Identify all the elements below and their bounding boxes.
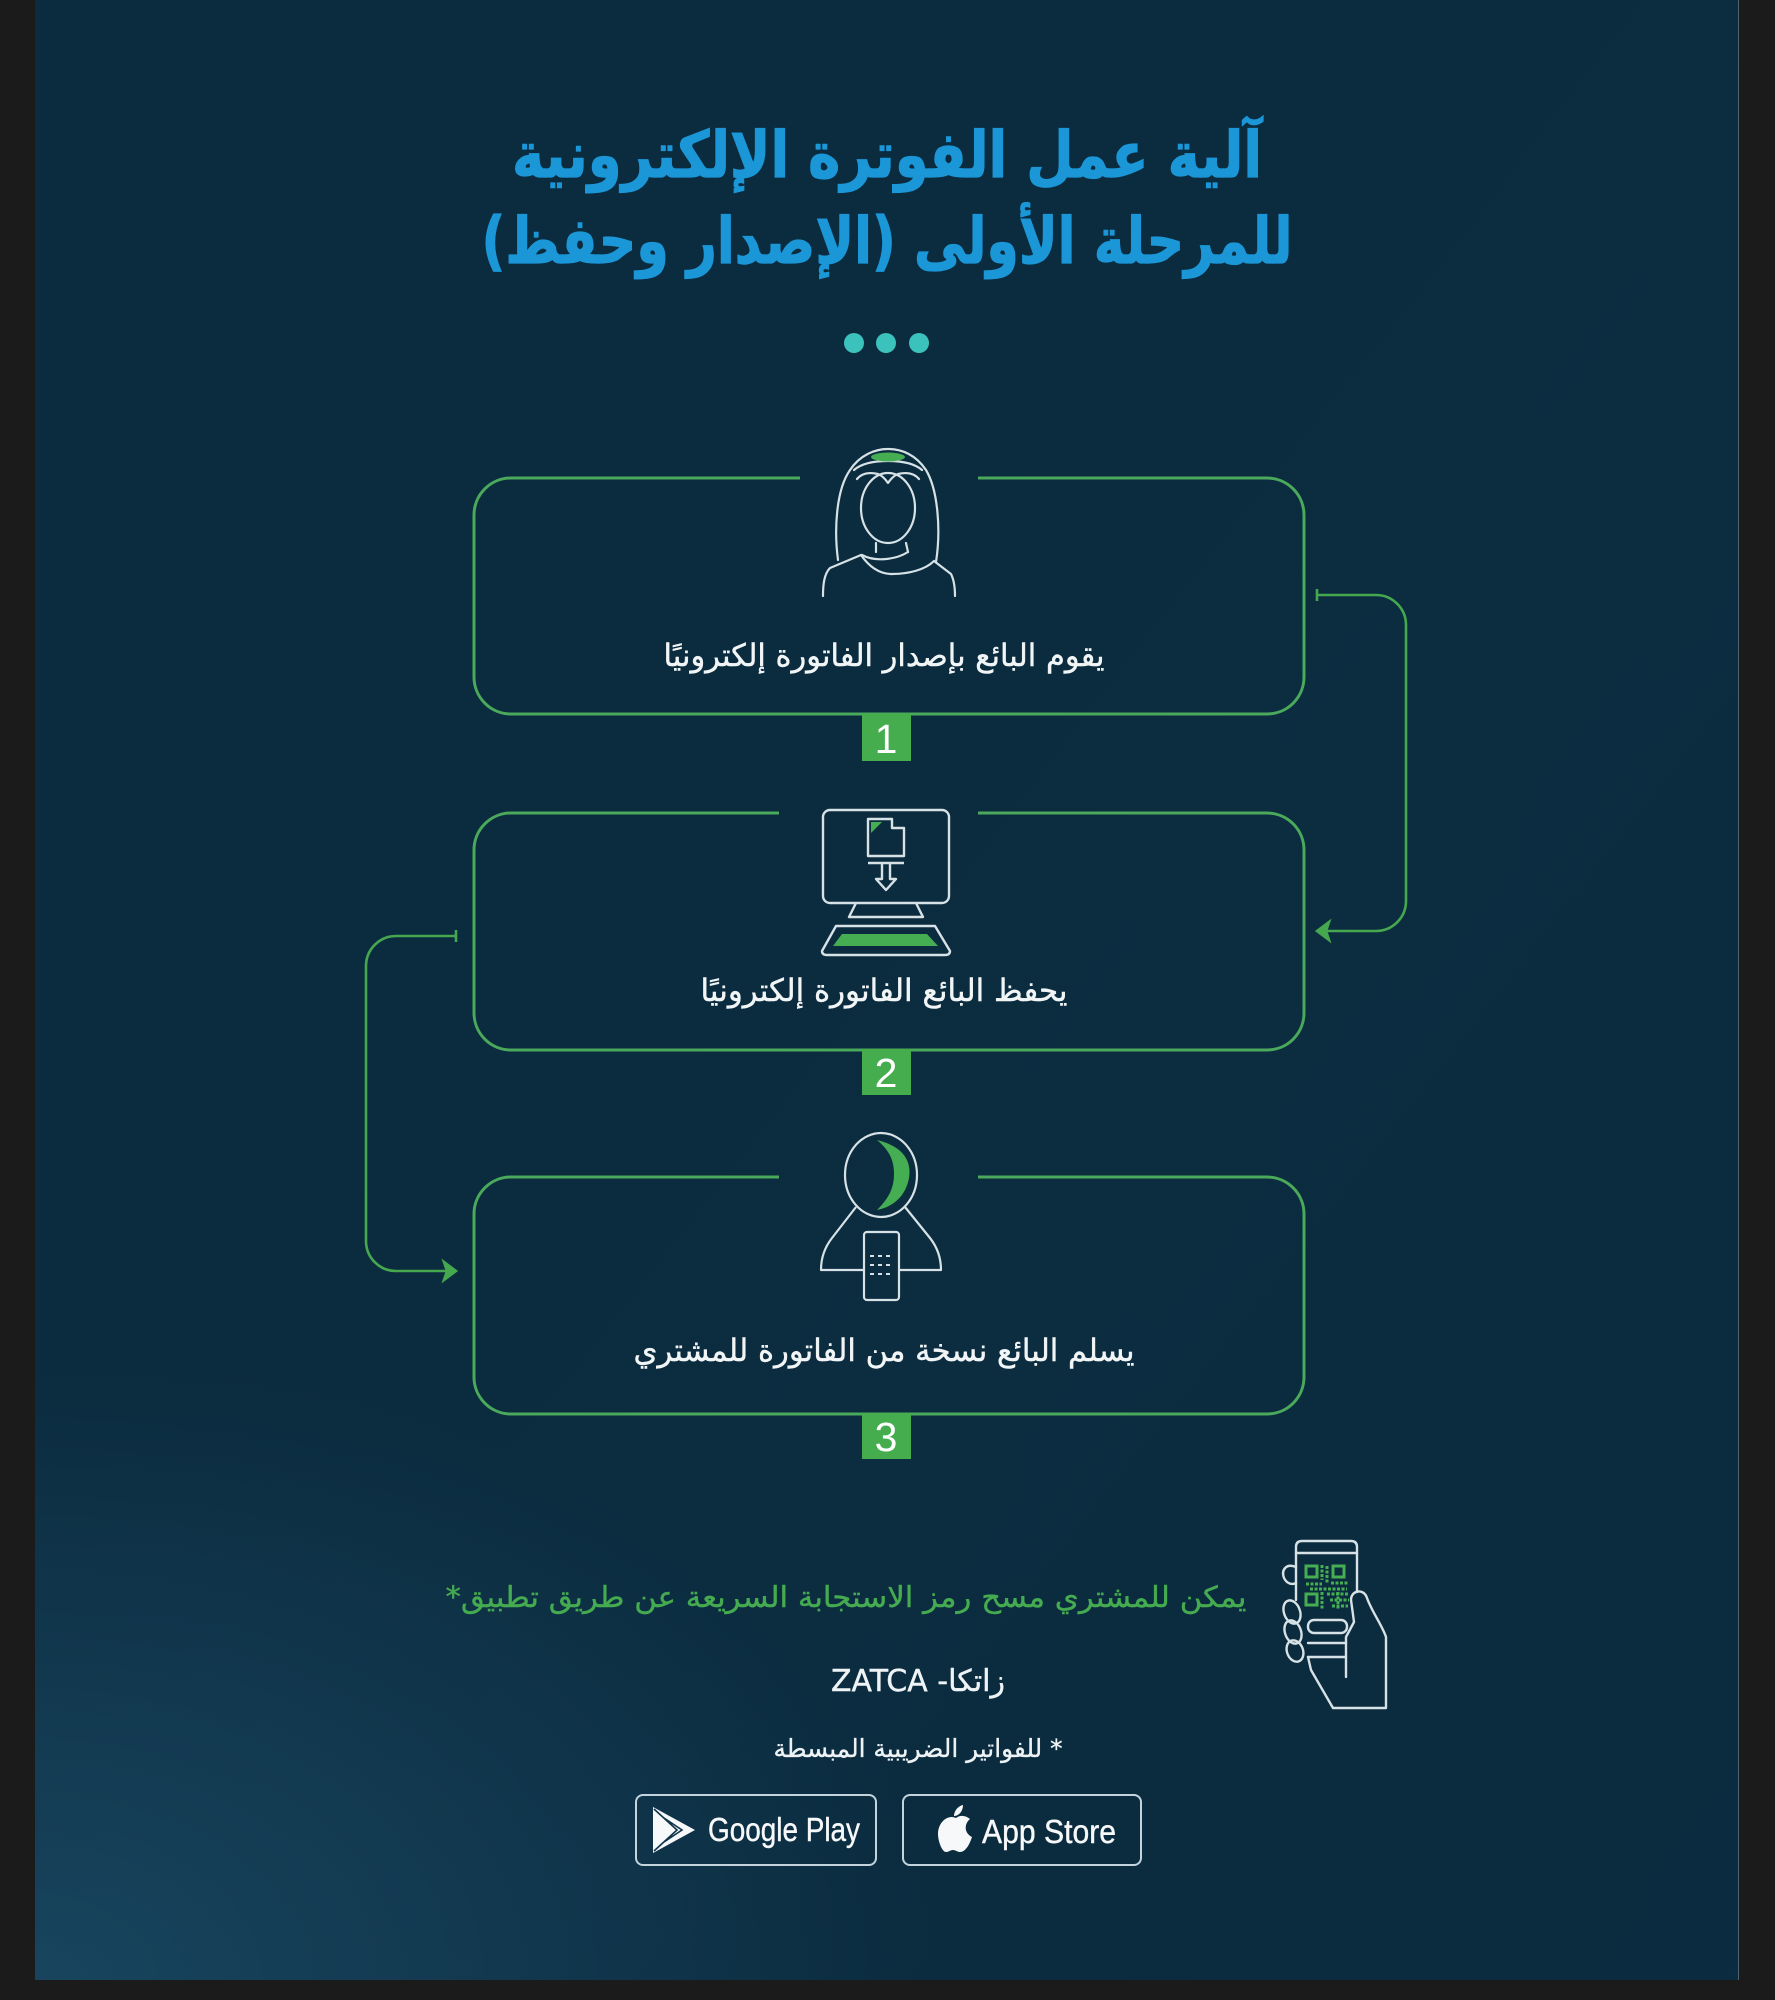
button: App Store: App Store xyxy=(982,1813,1116,1850)
step 1 badge xyxy=(862,714,911,762)
step 1 text: يقوم البائع بإصدار الفاتورة إلكترونيًا xyxy=(664,638,1104,674)
icon: play triangle xyxy=(653,1807,695,1853)
icon: apple xyxy=(938,1805,972,1852)
step 2 badge: 2 xyxy=(875,1050,897,1096)
step 3 frame xyxy=(474,1177,1304,1414)
arrow: step 1 to step 2 xyxy=(1317,589,1406,940)
button: Google Play xyxy=(636,1795,876,1865)
title xyxy=(482,115,1292,279)
QR code xyxy=(1306,1565,1349,1609)
step 2 frame xyxy=(474,813,1304,1050)
panel: step 3 xyxy=(474,1133,1304,1460)
button: App Store xyxy=(903,1795,1141,1865)
step 2 text: يحفظ البائع الفاتورة إلكترونيًا xyxy=(700,973,1068,1009)
step 1 frame xyxy=(474,478,1304,714)
step 3 badge: 3 xyxy=(875,1414,897,1460)
green note: يمكن للمشتري مسح رمز الاستجابة السريعة عن طريق تطبيق* xyxy=(446,1580,1246,1614)
step 3 text: يسلم البائع نسخة من الفاتورة للمشتري xyxy=(634,1333,1134,1369)
step 1 badge: 1 xyxy=(875,716,897,762)
icon: buyer with phone xyxy=(821,1133,941,1300)
button: Google Play: Google Play xyxy=(708,1811,860,1848)
icon: hand holding phone with QR code xyxy=(1280,1541,1386,1708)
footnote: * للفواتير الضريبية المبسطة xyxy=(774,1734,1062,1763)
step 3 badge xyxy=(862,1413,911,1460)
title: آلية عمل الفوترة الإلكترونية xyxy=(512,115,1264,193)
title: للمرحلة الأولى (الإصدار وحفظ) xyxy=(482,202,1292,279)
icon: seller in ghutra xyxy=(823,449,955,596)
panel: step 2 xyxy=(474,810,1304,1096)
panel: step 1 xyxy=(474,449,1304,762)
arrow: step 2 to step 3 xyxy=(366,930,456,1280)
icon: computer saving invoice xyxy=(822,810,950,955)
decorative dots xyxy=(844,333,929,353)
ZATCA line: زاتكا- ZATCA xyxy=(831,1664,1005,1699)
step 2 badge xyxy=(862,1049,911,1096)
